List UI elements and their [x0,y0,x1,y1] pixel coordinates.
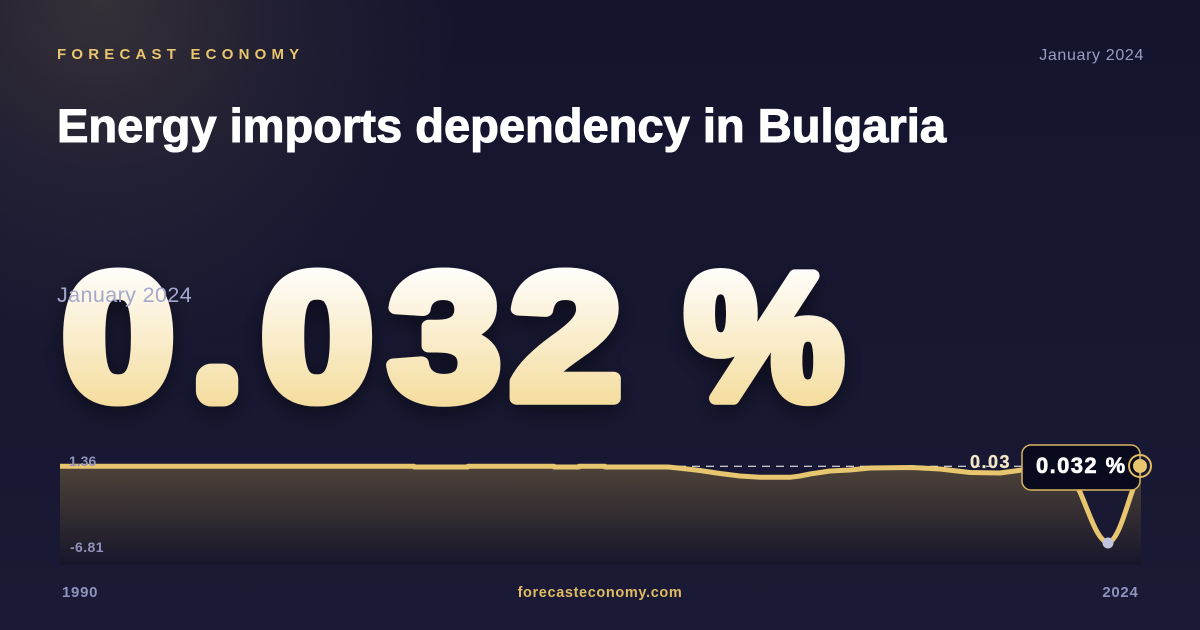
chart [60,445,1151,565]
chart area [60,466,1141,565]
tooltip: 0.032 % [1036,453,1127,478]
previous value: 0.03 [970,452,1011,472]
axis max: 1.36 [69,453,96,469]
date overlay: January 2024 [57,283,192,307]
chart line [60,466,1141,543]
big value: % [686,237,843,436]
title: Energy imports dependency in Bulgaria [57,99,947,152]
end year: 2024 [1102,584,1138,601]
tooltip [1022,445,1140,490]
website: forecasteconomy.com [518,585,682,601]
current marker [1129,455,1151,477]
dashed reference line [678,465,1025,467]
big value [63,237,843,437]
big value: 032 [261,238,622,437]
axis min: -6.81 [70,539,104,555]
brand label: FORECAST ECONOMY [57,46,304,63]
big value: . [206,319,228,408]
start year: 1990 [62,584,98,601]
low marker [1102,538,1114,548]
big value: 0 [63,238,174,437]
date top right: January 2024 [1039,47,1144,64]
